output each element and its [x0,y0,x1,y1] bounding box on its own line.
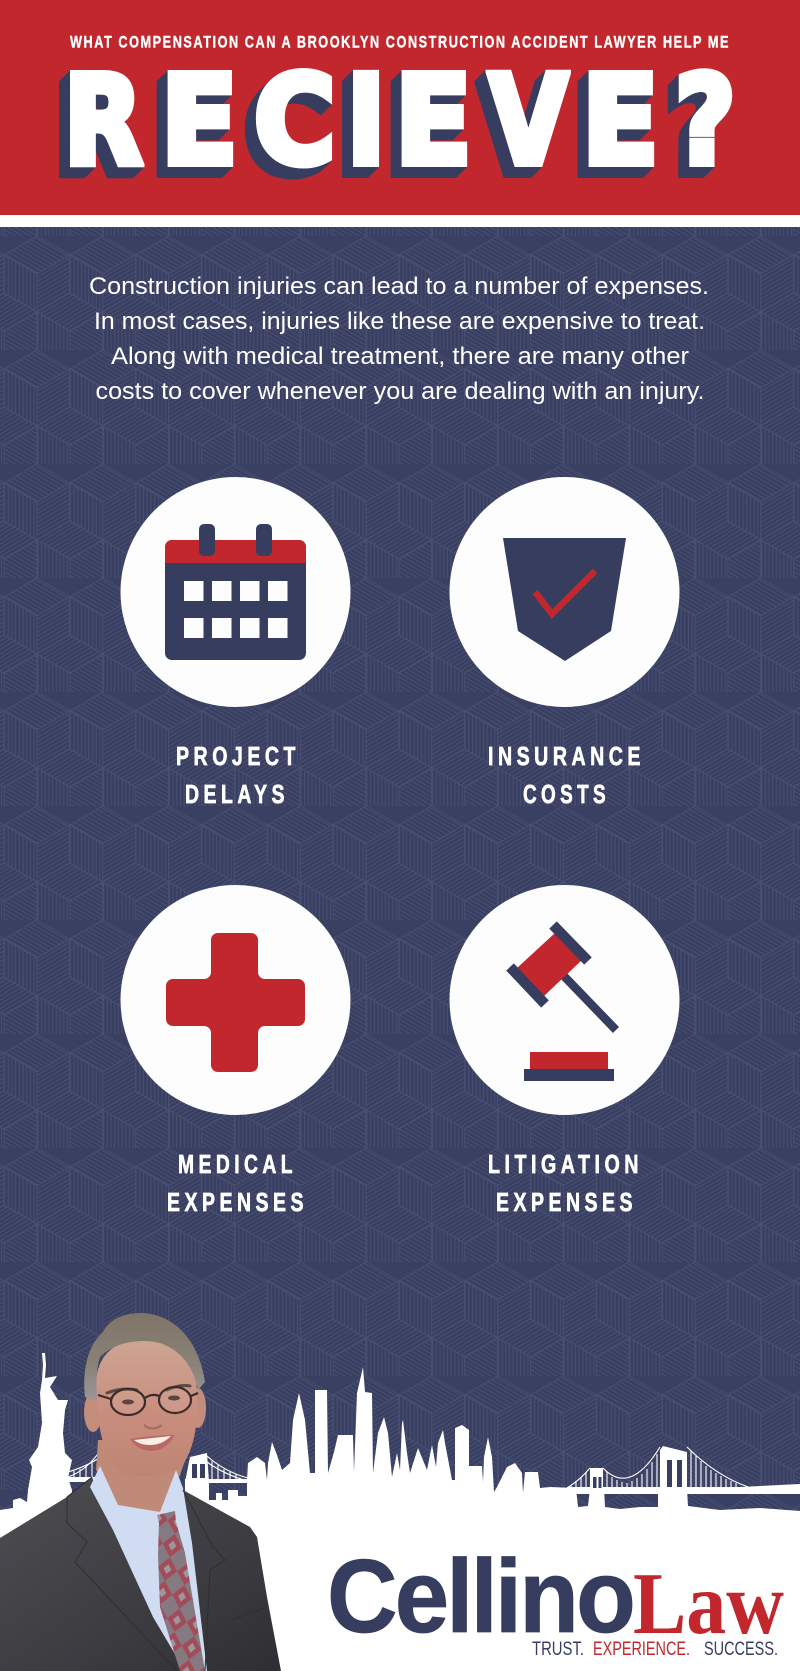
label: project delays [176,741,300,809]
label: insurance costs [488,741,645,809]
label: litigation expenses: EXPENSES [496,1187,637,1217]
headline: RECIEVE? with navy block shadow: R [64,50,142,192]
intro paragraph [89,273,709,405]
icon: shield with check [503,538,626,661]
icon: medical cross [166,933,305,1072]
circle: project delays [120,477,350,707]
portrait: hair [84,1313,205,1400]
headline: RECIEVE? with navy block shadow: V [488,50,567,192]
headline: RECIEVE? with navy block shadow [59,50,736,192]
headline: RECIEVE? with navy block shadow: E [395,50,472,192]
panel: insurance costs [450,477,680,809]
headline: RECIEVE? with navy block shadow: E [161,50,238,192]
portrait: tie [157,1511,205,1671]
label: insurance costs: COSTS [523,779,610,809]
portrait: glasses [98,1387,198,1415]
portrait: eyes [122,1396,180,1404]
portrait: eyebrows [107,1386,190,1393]
logo wordmark: Law: Law [633,1556,784,1653]
label: medical expenses: MEDICAL [178,1149,297,1179]
label: project delays: PROJECT [176,741,300,771]
portrait: lapels [67,1477,265,1671]
panel: medical expenses [120,885,350,1217]
logo tagline: EXPERIENCE. [593,1638,690,1660]
panel: litigation expenses [450,885,680,1217]
label: medical expenses: EXPENSES [167,1187,308,1217]
circle: medical expenses [120,885,350,1115]
label: medical expenses [167,1149,308,1217]
label: insurance costs: INSURANCE [488,741,645,771]
circle: insurance costs [450,477,680,707]
logo wordmark: Cellino: Cellino [327,1539,633,1655]
intro paragraph: Construction injuries can lead to a number of expenses. [89,273,709,300]
portrait: suit jacket [0,1477,281,1671]
logo: Cellino Law [327,1539,784,1660]
headline: RECIEVE? with navy block shadow: C [254,50,336,192]
label: project delays: DELAYS [185,779,289,809]
panel: project delays [120,477,350,809]
panel: red header band [0,0,800,215]
portrait of attorney [0,1313,281,1671]
intro paragraph: In most cases, injuries like these are expensive to treat. [94,308,705,335]
headline: RECIEVE? with navy block shadow: I [347,50,385,192]
skyline silhouette [0,1353,800,1671]
icon: calendar [165,524,306,660]
portrait: face [96,1338,197,1476]
portrait: ears [84,1388,206,1432]
portrait: shirt [90,1466,207,1671]
circle: litigation expenses [450,885,680,1115]
headline: RECIEVE? with navy block shadow: ? [675,50,736,192]
logo tagline: TRUST. [532,1638,584,1660]
portrait: neck [96,1440,192,1514]
intro paragraph: Along with medical treatment, there are many other [111,343,689,370]
portrait: smile [130,1435,175,1451]
label: litigation expenses [488,1149,643,1217]
intro paragraph: costs to cover whenever you are dealing with an injury. [96,378,704,405]
headline: RECIEVE? with navy block shadow: E [582,50,659,192]
portrait: nose shadow [144,1425,162,1428]
label: litigation expenses: LITIGATION [488,1149,643,1179]
logo tagline [532,1638,778,1660]
icon: gavel [510,925,616,1081]
